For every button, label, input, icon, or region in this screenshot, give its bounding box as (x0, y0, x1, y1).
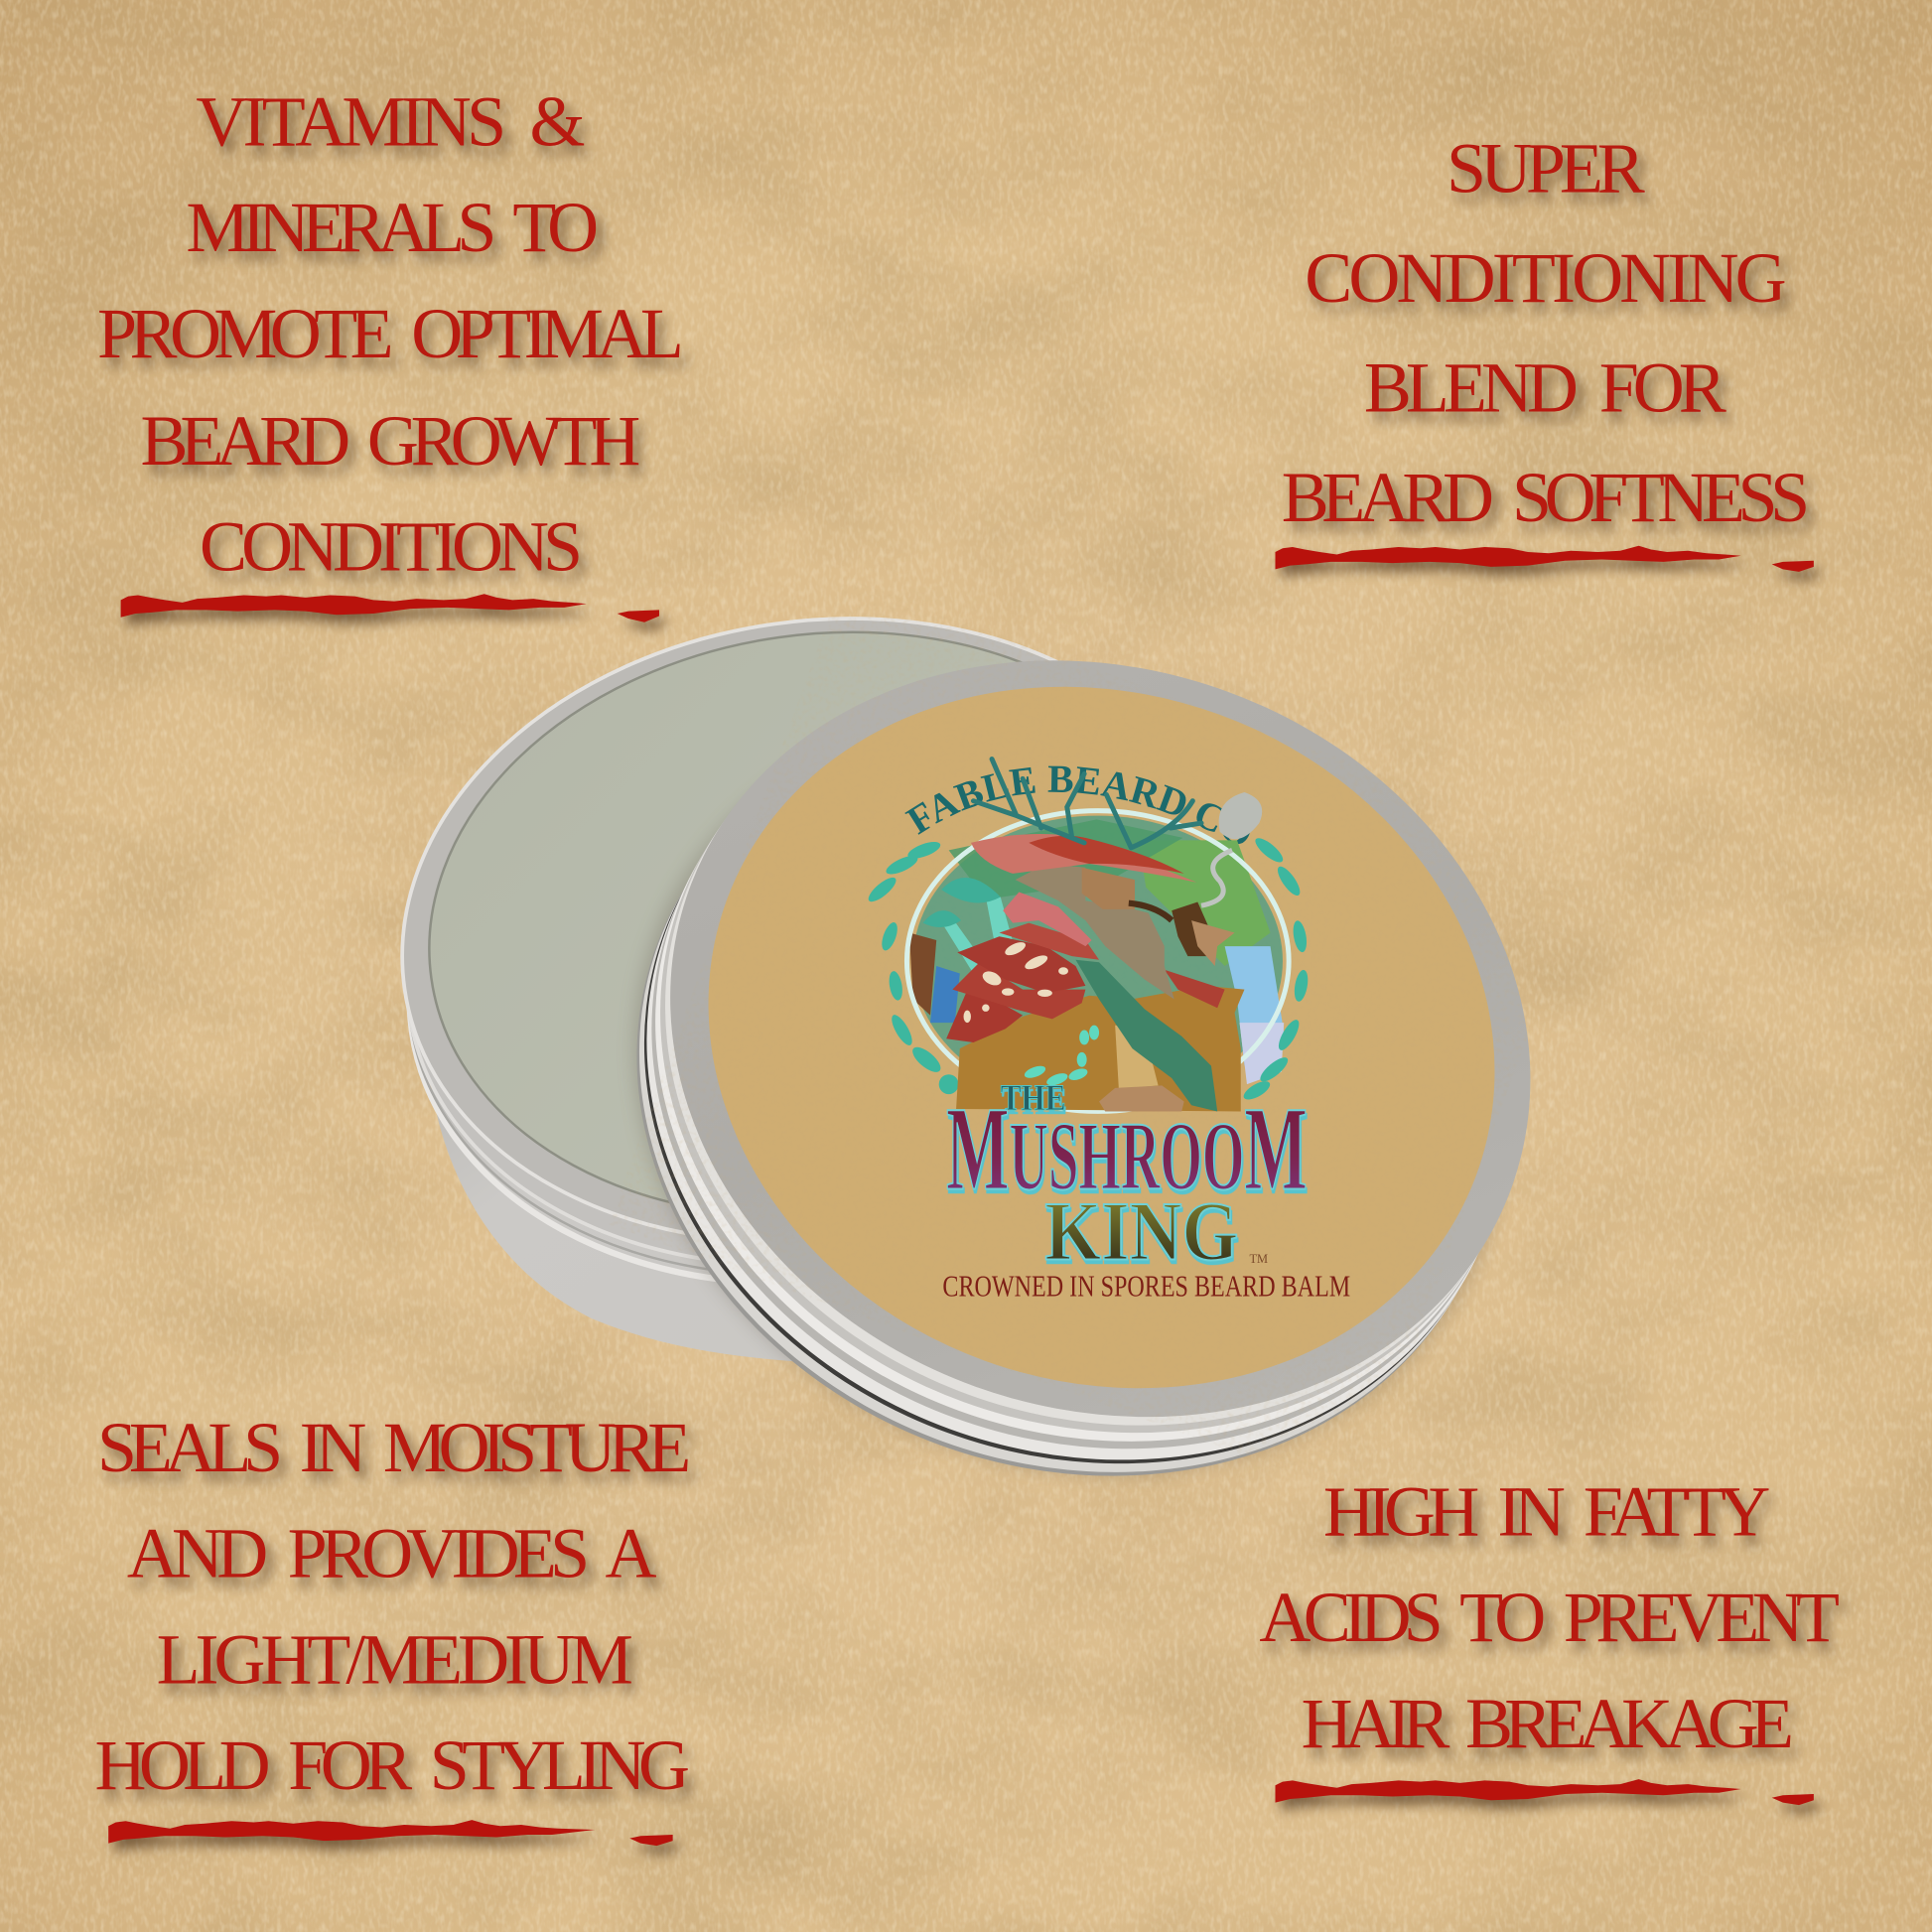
background scene (909, 816, 1284, 1106)
lower hand (1099, 1085, 1184, 1111)
MUSHROOM wordmark: MUSHROOM (946, 1084, 1308, 1216)
torn red underline (108, 1820, 673, 1846)
tin side wall (409, 863, 1109, 1363)
callout text lines: PROMOTE OPTIMAL (97, 294, 680, 373)
lid metal ring (563, 542, 1638, 1536)
callout: seals in moisture (95, 1408, 688, 1846)
callout text lines (97, 81, 680, 587)
callout: super conditioning (1276, 129, 1814, 572)
brand arc text: FABLE BEARD CO (904, 766, 1250, 844)
callout text lines: LIGHT/MEDIUM (157, 1619, 631, 1699)
callout text lines: HIGH IN FATTY (1323, 1471, 1769, 1551)
product subtitle: CROWNED IN SPORES BEARD BALM (942, 1269, 1350, 1304)
callout text lines: MINERALS TO (186, 188, 597, 267)
label paper grain (609, 578, 1594, 1497)
antlers (973, 759, 1201, 848)
balm surface (391, 583, 1248, 1266)
smoke wisp (1201, 792, 1262, 905)
callout text lines (1259, 1471, 1839, 1763)
thread bands on tin (366, 592, 1280, 1336)
robe centre panel (1115, 1026, 1159, 1089)
tin lid (614, 618, 1531, 1493)
teal mushrooms (923, 878, 1017, 980)
KING wordmark: KING (1044, 1185, 1238, 1278)
robe (956, 986, 1244, 1111)
THE wordmark: THE (1001, 1078, 1066, 1119)
torn red underline (1276, 1779, 1814, 1805)
glowing vine ring (906, 811, 1289, 1111)
lid cast shadow (527, 588, 1612, 1593)
callout text lines: CONDITIONING (1305, 238, 1785, 318)
red mushroom capelet (946, 893, 1225, 1042)
tin rim (361, 566, 1273, 1295)
callout text lines (1282, 129, 1806, 537)
mushroom hat (971, 834, 1196, 883)
face (1082, 868, 1135, 909)
beard (1016, 864, 1174, 1000)
lid skirt (529, 548, 1633, 1594)
callout: high in fatty acids (1259, 1471, 1839, 1805)
callout text lines: CONDITIONS (200, 507, 579, 587)
trademark: TM (1249, 1252, 1268, 1266)
callout text lines: BLEND FOR (1364, 348, 1726, 428)
callout text lines: BEARD GROWTH (140, 401, 638, 481)
callout text lines: SUPER (1447, 129, 1645, 208)
callout text lines: SEALS IN MOISTURE (97, 1408, 688, 1487)
callout text lines: BEARD SOFTNESS (1282, 458, 1806, 537)
green scarf (1075, 960, 1217, 1111)
callout text lines: ACIDS TO PREVENT (1259, 1578, 1839, 1657)
callout: vitamins and minerals (97, 81, 680, 622)
pipe and hand (1129, 901, 1235, 966)
label artwork: mushroom king (868, 757, 1350, 1304)
open tin base with balm (361, 566, 1280, 1363)
torn red underline (121, 594, 659, 622)
callout text lines: HOLD FOR STYLING (95, 1725, 688, 1805)
label paper (609, 578, 1594, 1497)
callout text lines: VITAMINS & (196, 81, 585, 161)
callout text lines (95, 1408, 688, 1805)
teal leaves (865, 834, 1310, 1103)
glowing robe dots (1023, 1026, 1099, 1088)
torn red underline (1276, 546, 1814, 572)
callout text lines: AND PROVIDES A (127, 1514, 657, 1593)
callout text lines: HAIR BREAKAGE (1302, 1684, 1791, 1763)
